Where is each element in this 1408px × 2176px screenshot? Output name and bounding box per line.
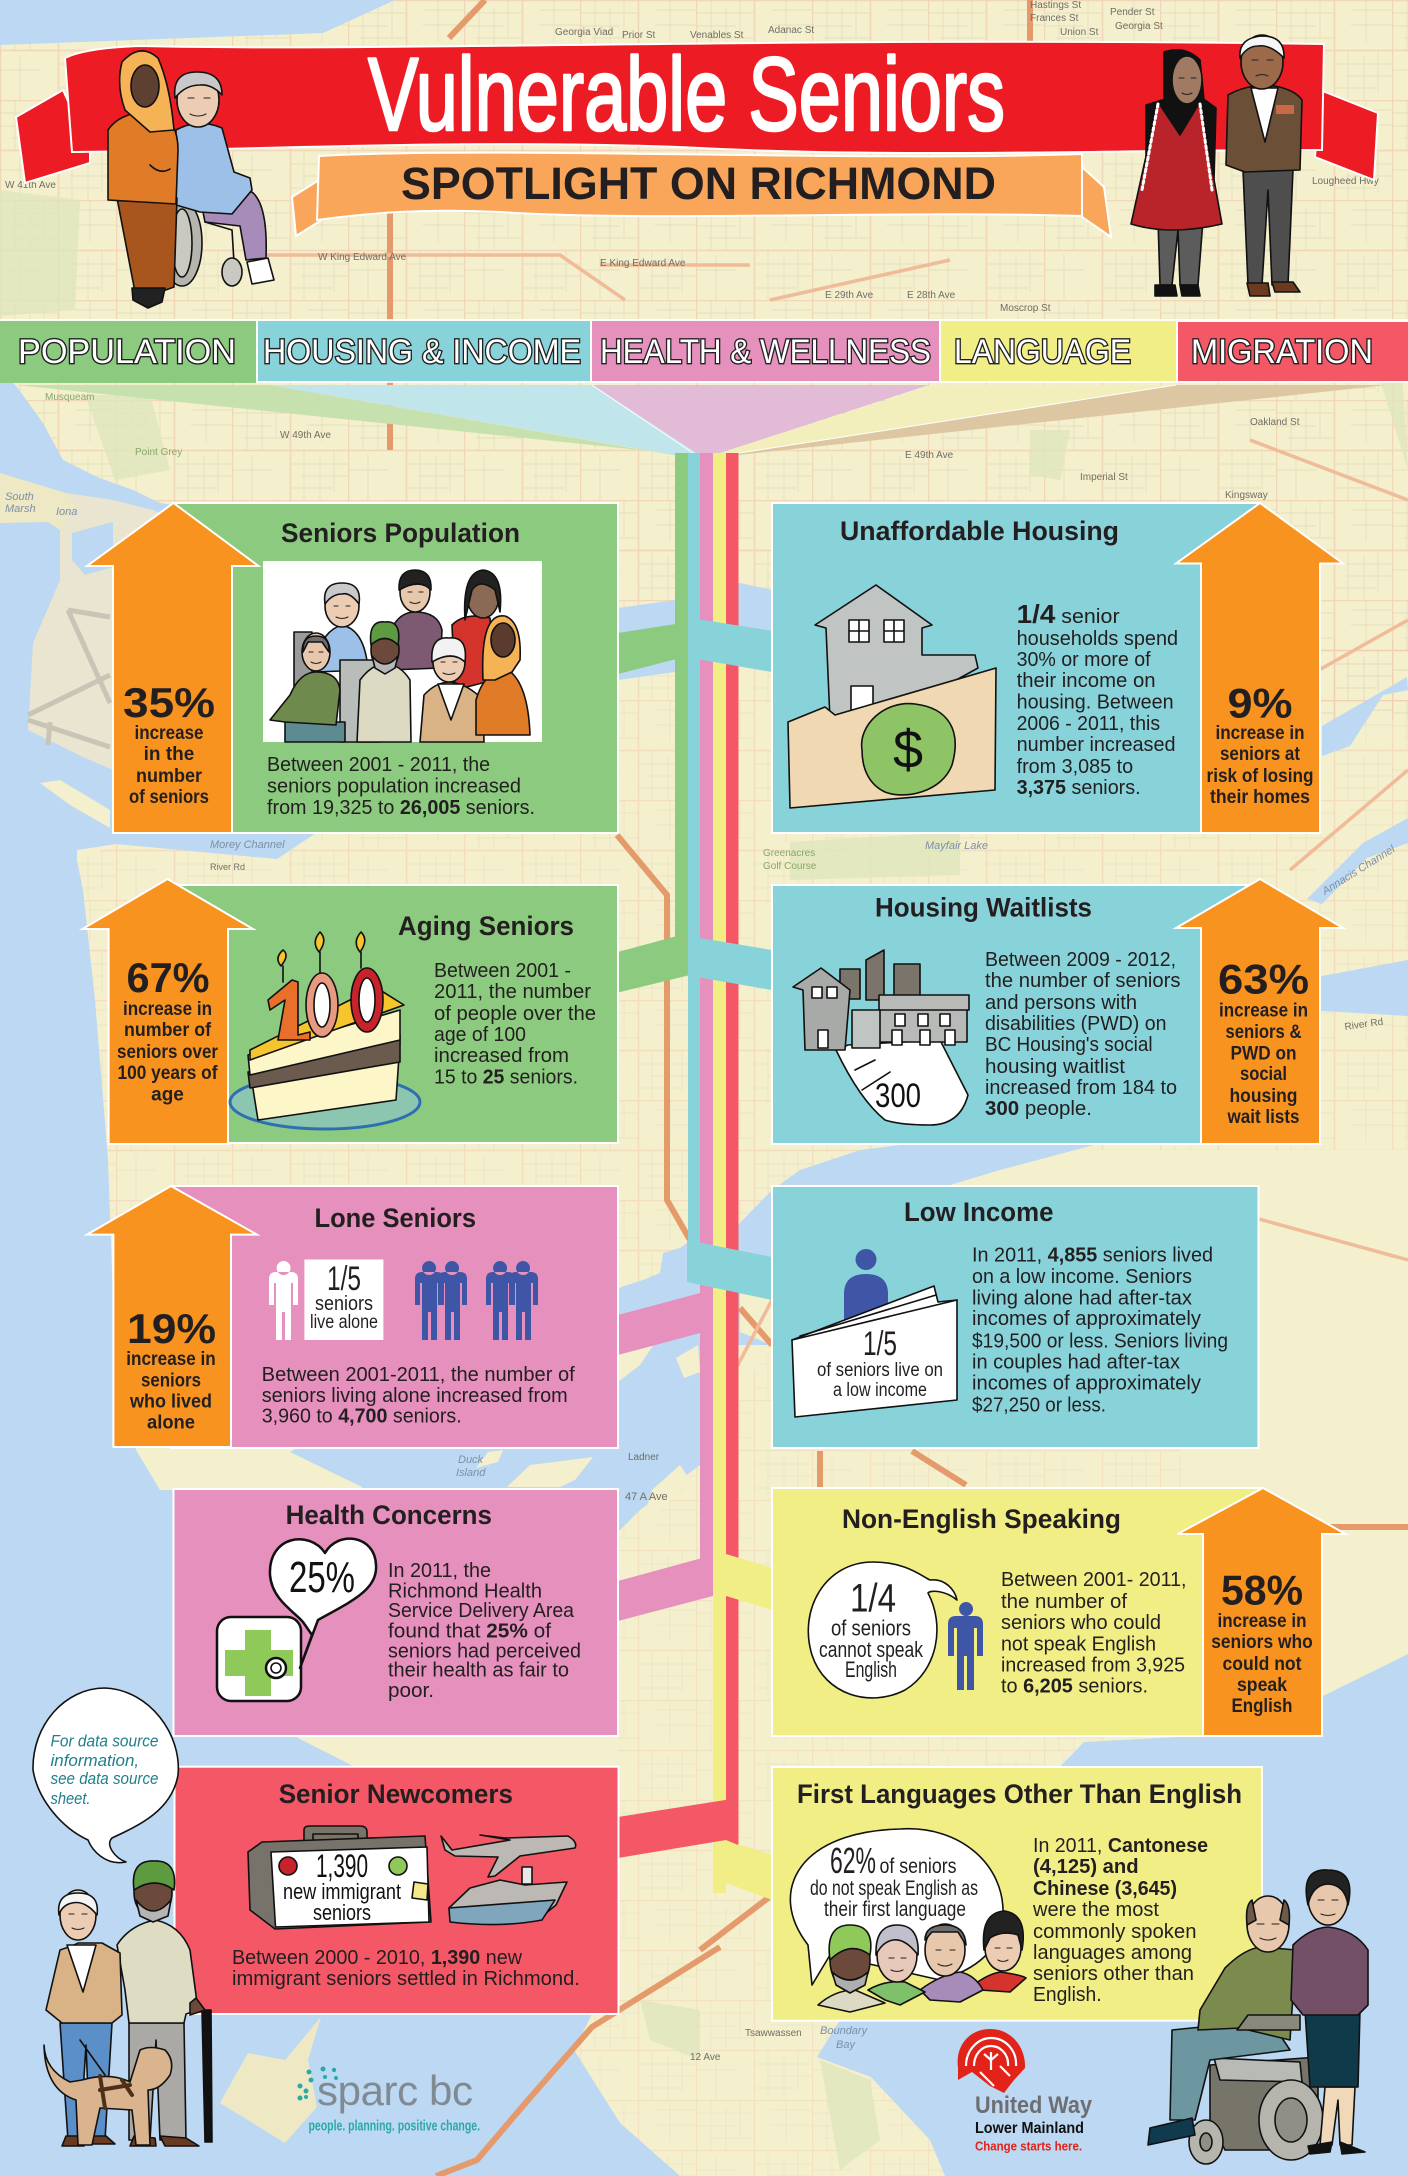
body text: were the most bbox=[1032, 1899, 1159, 1921]
arrow: 19% increase bbox=[87, 1186, 257, 1447]
body text: $27,250 or less. bbox=[972, 1394, 1106, 1416]
characters: woman in hijab and woman in wheelchair bbox=[108, 51, 274, 308]
icon: one white person bbox=[269, 1261, 298, 1340]
map labels: Georgia Viad bbox=[555, 27, 613, 38]
map labels: Greenacres bbox=[763, 848, 815, 859]
body text: In 2011, the bbox=[388, 1560, 491, 1582]
body text: Chinese (3,645) bbox=[1033, 1878, 1177, 1900]
body text: housing waitlist bbox=[985, 1056, 1125, 1078]
body text bbox=[434, 960, 596, 1088]
body text: from 3,085 to bbox=[1017, 756, 1133, 778]
body text: increased from bbox=[434, 1045, 569, 1067]
body text: Richmond Health bbox=[388, 1580, 542, 1602]
tab: health and wellness bbox=[592, 321, 939, 381]
logo: united way: Change starts here. bbox=[975, 2139, 1082, 2154]
map labels: Union St bbox=[1060, 27, 1099, 38]
logo: sparc bc bbox=[298, 2066, 480, 2135]
navigation tabs bbox=[0, 319, 1408, 383]
body text: 2006 - 2011, this bbox=[1017, 713, 1160, 735]
body text: In 2011, 4,855 seniors lived bbox=[972, 1244, 1213, 1266]
body text bbox=[232, 1947, 580, 1990]
arrow: 19% increase: increase in bbox=[126, 1349, 216, 1370]
icon: ship bbox=[449, 1867, 567, 1925]
body text: to 6,205 seniors. bbox=[1001, 1676, 1148, 1698]
heading: Lone Seniors bbox=[314, 1203, 476, 1233]
arrow: 67% increase bbox=[82, 879, 253, 1144]
tab: housing and income: HOUSING & INCOME bbox=[263, 333, 581, 371]
arrow: 63% increase: wait lists bbox=[1227, 1107, 1300, 1128]
heading: Housing Waitlists bbox=[875, 893, 1092, 923]
logo: united way: Lower Mainland bbox=[975, 2120, 1084, 2137]
panel: first languages other than english bbox=[772, 1767, 1262, 2021]
body text: seniors living alone increased from bbox=[262, 1385, 568, 1407]
arrow: 19% increase: alone bbox=[147, 1413, 195, 1434]
body text: $19,500 or less. Seniors living bbox=[972, 1330, 1228, 1352]
callout: 1/5 seniors live alone: 1/5 bbox=[327, 1260, 361, 1298]
illustration: birthday cake with 100 candles bbox=[230, 932, 420, 1129]
map labels: W King Edward Ave bbox=[318, 252, 407, 263]
arrow: 58% increase: English bbox=[1232, 1696, 1292, 1717]
arrow: 63% increase: seniors & bbox=[1226, 1022, 1302, 1043]
callout: data source speech bubble: information, bbox=[50, 1751, 139, 1770]
logo: sparc bc: people. planning. positive change. bbox=[308, 2118, 480, 2135]
body text: languages among bbox=[1033, 1942, 1192, 1964]
map labels: Lougheed Hwy bbox=[1312, 176, 1379, 187]
illustration: suitcase: seniors bbox=[313, 1900, 371, 1925]
map labels: 47 A Ave bbox=[625, 1491, 668, 1503]
icon: person behind wallet bbox=[792, 1249, 957, 1417]
arrow: 35% increase: increase bbox=[134, 723, 204, 744]
body text: poor. bbox=[388, 1680, 434, 1702]
panel: housing waitlists bbox=[772, 879, 1343, 1144]
arrow: 67% increase: age bbox=[151, 1084, 184, 1106]
map labels: E 29th Ave bbox=[825, 290, 874, 301]
arrow: 63% increase: housing bbox=[1230, 1086, 1298, 1107]
icon: medical cross with heart speech bubble: 25% bbox=[289, 1553, 355, 1602]
body text: households spend bbox=[1017, 628, 1178, 650]
body text bbox=[985, 949, 1180, 1120]
callout: 62% speech bubble with faces bbox=[790, 1829, 1026, 2012]
map labels: Tsawwassen bbox=[745, 2028, 802, 2039]
heading: Senior Newcomers bbox=[279, 1779, 513, 1809]
banner: red title ribbon bbox=[16, 42, 1378, 183]
map labels: Oakland St bbox=[1250, 417, 1300, 428]
callout: 1/5 seniors live alone bbox=[304, 1260, 383, 1340]
callout: 62% speech bubble with faces: of seniors bbox=[880, 1855, 956, 1878]
map labels: Duck bbox=[458, 1454, 484, 1466]
body text: Between 2000 - 2010, 1,390 new bbox=[232, 1947, 523, 1969]
colour lines and branches bbox=[618, 453, 772, 1900]
map labels: Golf Course bbox=[763, 861, 817, 872]
map labels: Annacis Channel bbox=[1319, 843, 1398, 898]
arrow: 58% increase: speak bbox=[1237, 1675, 1287, 1696]
body text: in couples had after-tax bbox=[972, 1352, 1180, 1374]
callout: data source speech bubble bbox=[33, 1688, 178, 1863]
characters: man in power wheelchair and woman bbox=[1148, 1870, 1368, 2164]
map labels: Imperial St bbox=[1080, 472, 1128, 483]
arrow: 63% increase: social bbox=[1240, 1064, 1287, 1085]
body text: (4,125) and bbox=[1033, 1856, 1139, 1878]
map labels: W 49th Ave bbox=[280, 430, 331, 441]
body text: living alone had after-tax bbox=[972, 1288, 1192, 1310]
characters: man with guide dog and man with cane bbox=[44, 1861, 212, 2146]
map labels: Boundary bbox=[820, 2025, 869, 2037]
body text: number increased bbox=[1017, 734, 1176, 756]
body text: from 19,325 to 26,005 seniors. bbox=[267, 797, 535, 819]
callout: 1/4 speech bubble: English bbox=[845, 1657, 897, 1682]
logo: sparc bc: sparc bc bbox=[317, 2067, 473, 2114]
tab: population bbox=[0, 321, 256, 383]
arrow: 35% increase bbox=[87, 503, 258, 833]
arrow: 9% increase: their homes bbox=[1210, 787, 1310, 808]
arrow: 63% increase bbox=[1176, 879, 1343, 1144]
map labels: Marsh bbox=[5, 503, 36, 515]
arrow: 9% increase: increase in bbox=[1216, 723, 1304, 744]
body text: seniors other than bbox=[1033, 1963, 1194, 1985]
callout: 62% speech bubble with faces: their first language bbox=[824, 1898, 966, 1921]
body text: found that 25% of bbox=[388, 1621, 551, 1643]
illustration: group of seniors bbox=[263, 561, 542, 742]
heading: Non-English Speaking bbox=[842, 1504, 1121, 1534]
map labels: Mayfair Lake bbox=[925, 840, 988, 852]
characters: woman in red vest and man in cardigan bbox=[1131, 35, 1302, 296]
body text: BC Housing's social bbox=[985, 1034, 1153, 1056]
body text: and persons with bbox=[985, 992, 1137, 1014]
heading: Low Income bbox=[904, 1197, 1054, 1227]
body text bbox=[972, 1244, 1228, 1416]
map labels: Prior St bbox=[622, 30, 656, 41]
illustration: housing and waitlist scroll: 300 bbox=[875, 1077, 921, 1115]
subtitle: SPOTLIGHT ON RICHMOND bbox=[401, 158, 996, 209]
icon: person behind wallet: 1/5 bbox=[863, 1325, 897, 1363]
panel: aging seniors bbox=[82, 879, 618, 1144]
tab: language: LANGUAGE bbox=[954, 333, 1131, 371]
body text: increased from 184 to bbox=[985, 1077, 1177, 1099]
arrow: 58% increase: 58% bbox=[1221, 1567, 1303, 1614]
tab: housing and income bbox=[258, 321, 590, 381]
map labels: 12 Ave bbox=[690, 2052, 721, 2063]
body text: In 2011, Cantonese bbox=[1033, 1835, 1208, 1857]
panel: unaffordable housing bbox=[772, 503, 1343, 833]
callout: 1/4 speech bubble: cannot speak bbox=[819, 1637, 924, 1662]
icon: person behind wallet: a low income bbox=[833, 1380, 927, 1401]
arrow: 67% increase: increase in bbox=[123, 999, 212, 1020]
callout: 62% speech bubble with faces: 62% bbox=[830, 1840, 876, 1881]
map labels: E 49th Ave bbox=[905, 450, 954, 461]
body text: 3,375 seniors. bbox=[1017, 777, 1141, 799]
body text: their health as fair to bbox=[388, 1660, 569, 1682]
map labels: Adanac St bbox=[768, 25, 814, 36]
icon: four blue people bbox=[415, 1261, 538, 1340]
tab: migration: MIGRATION bbox=[1191, 333, 1373, 371]
heading: Aging Seniors bbox=[398, 911, 574, 941]
arrow: 58% increase: could not bbox=[1222, 1654, 1302, 1675]
body text: 1/4 senior bbox=[1017, 599, 1120, 629]
body text: 30% or more of bbox=[1017, 649, 1151, 671]
body text: Between 2001 - bbox=[434, 960, 571, 982]
map labels: E King Edward Ave bbox=[600, 258, 686, 269]
arrow: 19% increase: who lived bbox=[129, 1392, 212, 1413]
logo: united way: United Way bbox=[975, 2092, 1093, 2119]
illustration: suitcase: 1,390 bbox=[316, 1848, 368, 1884]
title: Vulnerable Seniors bbox=[368, 37, 1005, 153]
arrow: 58% increase: increase in bbox=[1218, 1611, 1306, 1632]
arrow: 63% increase: increase in bbox=[1219, 1001, 1308, 1022]
body text: 300 people. bbox=[985, 1098, 1092, 1120]
tab: health and wellness: HEALTH & WELLNESS bbox=[600, 333, 931, 371]
body text: housing. Between bbox=[1017, 692, 1174, 714]
map labels: Bay bbox=[836, 2039, 856, 2051]
body text: Between 2001-2011, the number of bbox=[262, 1364, 575, 1386]
body text: their income on bbox=[1017, 670, 1156, 692]
callout: 62% speech bubble with faces: do not speak English as bbox=[810, 1877, 978, 1900]
map labels: Georgia St bbox=[1115, 21, 1163, 32]
body text: Between 2009 - 2012, bbox=[985, 949, 1176, 971]
heading: Unaffordable Housing bbox=[840, 516, 1119, 546]
map labels: Venables St bbox=[690, 30, 744, 41]
map labels: Moscrop St bbox=[1000, 303, 1051, 314]
arrow: 9% increase: risk of losing bbox=[1206, 766, 1314, 787]
heading: Health Concerns bbox=[286, 1500, 492, 1530]
logo: united way bbox=[958, 2029, 1093, 2154]
arrow: 35% increase: 35% bbox=[123, 679, 215, 726]
body text: English. bbox=[1033, 1984, 1102, 2006]
icon: person behind wallet: of seniors live on bbox=[817, 1360, 943, 1381]
body text: incomes of approximately bbox=[972, 1373, 1201, 1395]
body text: 2011, the number bbox=[434, 981, 591, 1003]
body text bbox=[1032, 1835, 1208, 2006]
body text bbox=[388, 1560, 581, 1702]
illustration: housing and waitlist scroll bbox=[793, 950, 969, 1125]
icon: airplane bbox=[441, 1835, 576, 1877]
arrow: 19% increase: seniors bbox=[141, 1370, 201, 1392]
map labels: Hastings St bbox=[1030, 0, 1081, 11]
heading: Seniors Population bbox=[281, 518, 520, 548]
arrow: 63% increase: PWD on bbox=[1230, 1044, 1296, 1064]
body text: the number of bbox=[1001, 1591, 1127, 1613]
panel: health concerns bbox=[174, 1489, 618, 1736]
callout: data source speech bubble: see data source bbox=[50, 1769, 158, 1788]
arrow: 58% increase bbox=[1178, 1488, 1346, 1736]
body text bbox=[267, 754, 535, 819]
illustration: house in envelope with dollar bbox=[788, 585, 996, 808]
body text: on a low income. Seniors bbox=[972, 1266, 1192, 1288]
panel: seniors population bbox=[87, 503, 618, 833]
body text: seniors who could bbox=[1001, 1612, 1161, 1634]
arrow: 9% increase: seniors at bbox=[1220, 744, 1301, 765]
map labels: Pender St bbox=[1110, 7, 1155, 18]
illustration: suitcase: new immigrant bbox=[283, 1879, 401, 1904]
body text: Service Delivery Area bbox=[388, 1600, 575, 1622]
banner: orange subtitle ribbon bbox=[292, 153, 1111, 237]
callout: 1/4 speech bubble: of seniors bbox=[831, 1616, 911, 1641]
body text bbox=[1017, 599, 1178, 799]
map labels: Iona bbox=[56, 506, 77, 518]
body text: age of 100 bbox=[434, 1024, 526, 1046]
map labels: W 41th Ave bbox=[5, 180, 56, 191]
callout: 1/4 speech bubble: 1/4 bbox=[850, 1577, 896, 1621]
arrow: 19% increase: 19% bbox=[127, 1305, 216, 1352]
body text bbox=[262, 1364, 575, 1428]
arrow: 67% increase: number of bbox=[124, 1020, 212, 1041]
map labels: Ladner bbox=[628, 1452, 660, 1463]
arrow: 9% increase: 9% bbox=[1228, 680, 1292, 726]
funnel connecting tabs to colour lines bbox=[16, 385, 1387, 455]
tab: population: POPULATION bbox=[18, 333, 236, 371]
arrow: 35% increase: in the bbox=[144, 744, 194, 765]
body text: immigrant seniors settled in Richmond. bbox=[232, 1968, 580, 1990]
map labels: River Rd bbox=[210, 862, 245, 872]
tab: language bbox=[941, 321, 1176, 381]
body text: of people over the bbox=[434, 1003, 596, 1025]
map labels: Morey Channel bbox=[210, 839, 285, 851]
body text: 15 to 25 seniors. bbox=[434, 1066, 578, 1088]
arrow: 35% increase: number bbox=[136, 766, 203, 787]
body text: commonly spoken bbox=[1033, 1921, 1196, 1943]
body text: disabilities (PWD) on bbox=[985, 1013, 1166, 1035]
illustration: house in envelope with dollar: $ bbox=[893, 720, 923, 780]
arrow: 9% increase bbox=[1176, 503, 1343, 833]
map labels: Musqueam bbox=[45, 392, 94, 403]
panel: lone seniors bbox=[87, 1186, 618, 1448]
panel: non-english speaking bbox=[772, 1488, 1346, 1736]
arrow: 63% increase: 63% bbox=[1218, 955, 1309, 1002]
body text: 3,960 to 4,700 seniors. bbox=[262, 1406, 462, 1428]
icon: medical cross with heart speech bubble bbox=[217, 1539, 376, 1701]
map labels: River Rd bbox=[1344, 1017, 1384, 1033]
body text: the number of seniors bbox=[985, 970, 1180, 992]
arrow: 35% increase: of seniors bbox=[129, 787, 209, 808]
body text: increased from 3,925 bbox=[1001, 1655, 1185, 1677]
arrow: 67% increase: seniors over bbox=[117, 1042, 219, 1063]
callout: data source speech bubble: For data source bbox=[50, 1732, 158, 1751]
arrow: 67% increase: 67% bbox=[126, 954, 210, 1001]
map labels: E 28th Ave bbox=[907, 290, 956, 301]
callout: 1/5 seniors live alone: seniors bbox=[315, 1293, 373, 1315]
body text: seniors population increased bbox=[267, 776, 521, 798]
callout: 1/5 seniors live alone: live alone bbox=[310, 1312, 378, 1333]
icon: blue person bbox=[948, 1602, 983, 1690]
body text: Between 2001 - 2011, the bbox=[267, 754, 490, 776]
callout: data source speech bubble: sheet. bbox=[50, 1789, 90, 1808]
arrow: 58% increase: seniors who bbox=[1211, 1632, 1313, 1653]
map labels: Island bbox=[456, 1467, 486, 1479]
map labels: South bbox=[5, 491, 34, 503]
faces bbox=[818, 1911, 1026, 2012]
map labels: Frances St bbox=[1030, 13, 1079, 24]
arrow: 67% increase: 100 years of bbox=[118, 1063, 218, 1084]
panel: senior newcomers bbox=[174, 1767, 618, 2014]
tab: migration bbox=[1178, 322, 1408, 381]
illustration: suitcase bbox=[248, 1826, 431, 1929]
heading: First Languages Other Than English bbox=[797, 1779, 1242, 1809]
body text: incomes of approximately bbox=[972, 1308, 1201, 1330]
body text: seniors had perceived bbox=[388, 1640, 581, 1662]
map labels: Point Grey bbox=[135, 447, 182, 458]
map labels: Kingsway bbox=[1225, 490, 1268, 501]
body text: not speak English bbox=[1001, 1634, 1156, 1656]
body text: Between 2001- 2011, bbox=[1001, 1569, 1186, 1591]
panel: low income bbox=[772, 1186, 1258, 1448]
body text bbox=[1001, 1569, 1186, 1698]
callout: 1/4 speech bubble bbox=[808, 1562, 957, 1698]
